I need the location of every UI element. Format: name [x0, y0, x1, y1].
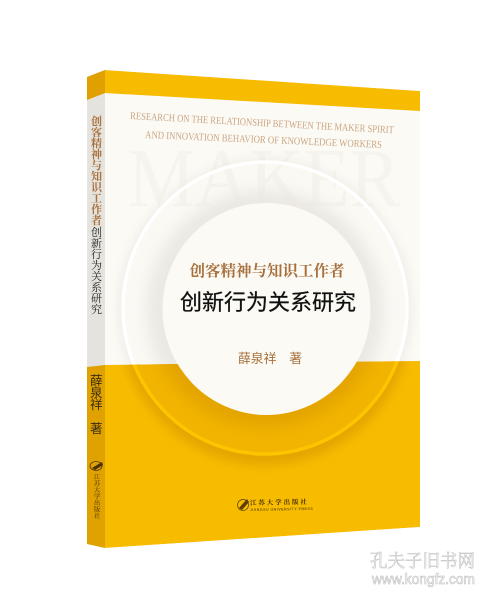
main title: 创新行为关系研究: [180, 290, 356, 315]
outer ring white part: [121, 160, 409, 365]
paper background: [105, 70, 420, 370]
subtitle: 创客精神与知识工作者: [189, 261, 345, 280]
English title: [130, 112, 394, 148]
spine title gold: 创客精神与知识工作者: [91, 114, 103, 227]
lower yellow panel: [105, 361, 420, 548]
English line 2: AND INNOVATION BEHAVIOR OF KNOWLEDGE WORKERS: [145, 130, 382, 151]
English line 1: RESEARCH ON THE RELATIONSHIP BETWEEN THE MAKER SPIRIT: [130, 111, 395, 136]
author: 薛泉祥 著: [238, 351, 302, 366]
site watermark Chinese: 孔夫子旧书网: [370, 551, 475, 571]
spine publisher logo: [90, 462, 103, 470]
ring shadow on yellow: [122, 361, 410, 466]
spine publisher name: 江苏大学出版社: [94, 473, 101, 520]
front cover: [105, 70, 420, 548]
book cover infographic: [87, 70, 474, 588]
top yellow band: [105, 70, 420, 111]
watermark word: MAKER: [128, 132, 400, 225]
spine author: 薛泉祥: [90, 374, 103, 412]
book spine: [87, 70, 105, 548]
publisher Chinese name: 江苏大学出版社: [250, 497, 309, 507]
spine title black: 创新行为关系研究: [91, 225, 102, 316]
inner circle: [162, 203, 370, 415]
publisher logo: [238, 499, 249, 510]
outer ring yellow part: [132, 361, 399, 456]
site watermark URL: www.kongfz.com: [371, 571, 475, 588]
ring shadow on paper: [119, 160, 411, 364]
publisher English name: JIANGSU UNIVERSITY PRESS: [250, 507, 313, 512]
spine author suffix: 著: [90, 422, 103, 436]
